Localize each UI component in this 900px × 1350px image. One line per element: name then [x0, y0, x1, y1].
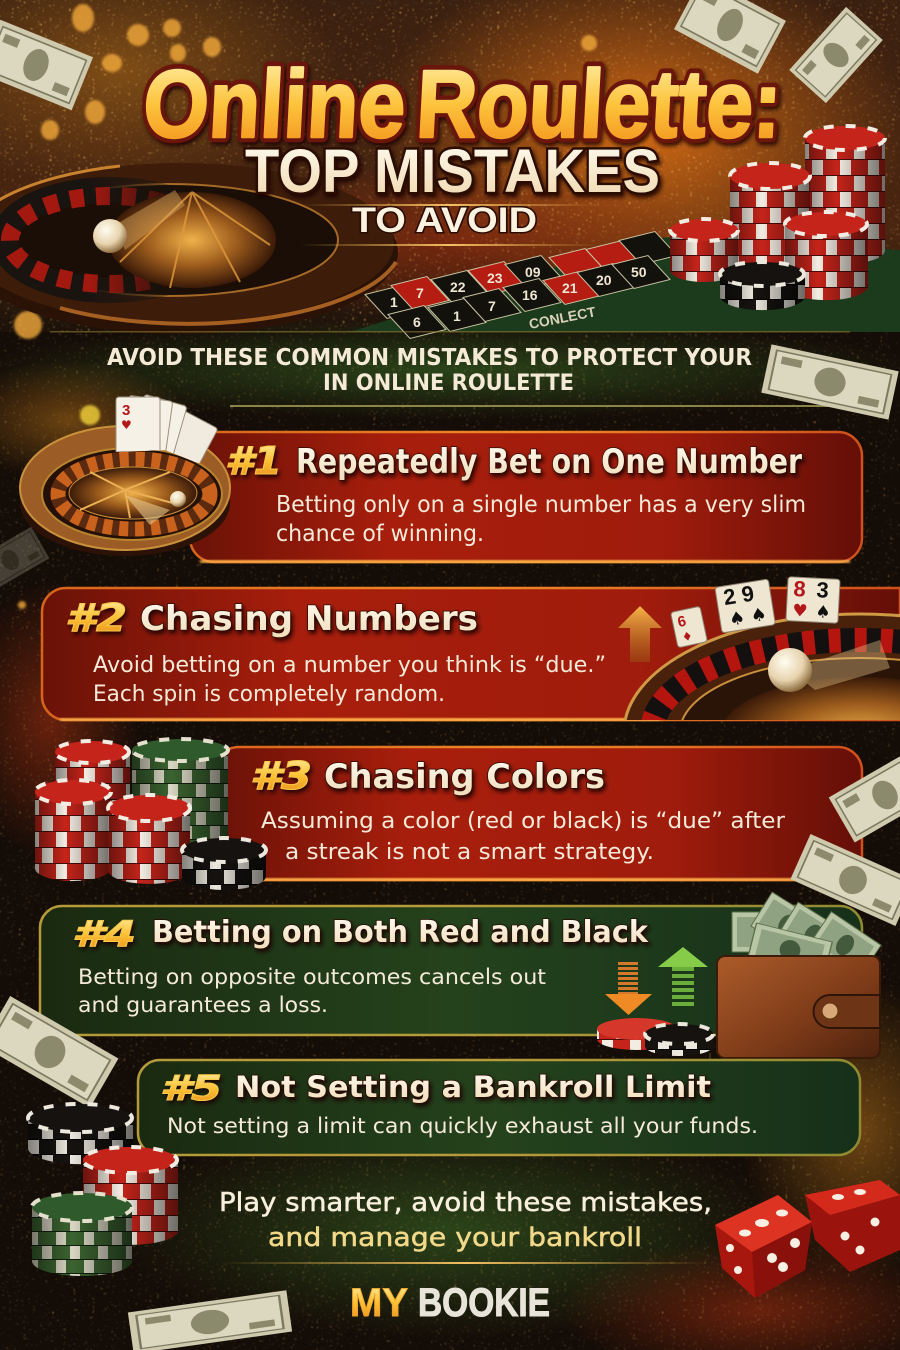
logo: [350, 1281, 550, 1325]
logo: MY: [350, 1281, 408, 1325]
icon: playing cards 1: 3: [164, 411, 179, 430]
closing message: Play smarter, avoid these mistakes,: [219, 1188, 712, 1218]
subtitle band: [50, 331, 870, 407]
title: [141, 51, 784, 246]
icon: up arrow green: [658, 947, 708, 1006]
betting table: 23: [487, 270, 503, 286]
heading 2: #2: [65, 596, 127, 640]
body text 3: a streak is not a smart strategy.: [285, 840, 654, 865]
icon: playing cards 1: 3: [122, 402, 130, 419]
body text 4: Betting on opposite outcomes cancels out: [78, 965, 546, 989]
betting table: 7: [416, 285, 424, 301]
betting table: 20: [596, 272, 612, 288]
body text 5: Not setting a limit can quickly exhaust all your funds.: [167, 1114, 758, 1138]
icon: down arrow orange: [605, 962, 652, 1015]
icon: playing cards 1: ♠: [129, 417, 142, 432]
body text 1: Betting only on a single number has a very slim: [276, 492, 806, 518]
betting table: 1: [390, 294, 398, 310]
icon: roulette wheel 1: [20, 426, 230, 556]
heading 5: Not Setting a Bankroll Limit: [235, 1070, 711, 1104]
betting table: 6: [413, 314, 421, 330]
betting table: 50: [631, 264, 647, 280]
logo: BOOKIE: [418, 1281, 550, 1325]
icon: playing cards 2: ♠ ♠: [728, 604, 768, 631]
heading 2: Chasing Numbers: [140, 599, 478, 639]
subtitle band: AVOID THESE COMMON MISTAKES TO PROTECT YOUR: [107, 345, 752, 371]
heading 3: Chasing Colors: [324, 757, 605, 797]
title: Online Roulette:: [141, 51, 784, 158]
heading 1: #1: [225, 439, 282, 483]
heading 4: #4: [72, 914, 136, 955]
body text 2: Avoid betting on a number you think is “due.”: [93, 653, 606, 678]
icon: playing cards 1: ♥: [157, 425, 173, 442]
money: left and bottom: [0, 527, 292, 1350]
icon: playing cards 2: ♦: [681, 629, 694, 645]
body text 4: [78, 965, 546, 1017]
betting table: 09: [525, 264, 541, 280]
icon: playing cards 1: [116, 394, 218, 464]
betting table: 7: [488, 298, 496, 314]
body text 1: chance of winning.: [276, 521, 484, 547]
icon: playing cards 1: ♥: [121, 418, 132, 432]
body text 3: Assuming a color (red or black) is “due” after: [261, 809, 786, 834]
body text 4: and guarantees a loss.: [78, 993, 328, 1017]
betting table: 22: [450, 279, 466, 295]
icon: playing cards 2: ♠: [815, 602, 831, 623]
money: subtitle right: [761, 344, 899, 420]
closing message: and manage your bankroll: [268, 1223, 642, 1253]
icon: playing cards 1: 3: [144, 401, 157, 419]
title: TO AVOID: [352, 201, 537, 240]
icon: chip stacks: [35, 739, 266, 890]
betting table: 21: [562, 280, 578, 296]
panel 3: [35, 739, 862, 890]
roulette wheel header: [0, 163, 398, 334]
panel 5: [138, 1060, 860, 1155]
body text 2: [93, 653, 606, 707]
closing message: [219, 1188, 712, 1264]
betting table: 16: [522, 287, 538, 303]
body text 3: [261, 809, 786, 865]
icon: wallet with cash: [717, 892, 881, 1058]
betting table: CONLECT: [528, 303, 597, 332]
panel 2: [40, 576, 900, 722]
panel 1: [20, 394, 862, 563]
icon: playing cards 2: 3: [816, 577, 829, 603]
heading 4: Betting on Both Red and Black: [152, 915, 649, 950]
panel 4: [40, 892, 881, 1058]
heading 1: Repeatedly Bet on One Number: [296, 442, 802, 482]
icon: up arrow orange: [618, 606, 662, 662]
title: Online Roulette:: [141, 51, 784, 158]
icon: small chips: [597, 1018, 713, 1056]
heading 5: #5: [160, 1069, 222, 1109]
money: top decorations: [0, 0, 883, 110]
body text 2: Each spin is completely random.: [93, 682, 445, 707]
betting table: [350, 232, 900, 338]
chip stacks top right: [670, 126, 885, 310]
icon: playing cards 1: 3: [132, 401, 143, 419]
subtitle band: IN ONLINE ROULETTE: [323, 371, 574, 396]
body text 1: [276, 492, 806, 547]
heading 3: #3: [250, 754, 312, 798]
heading 1: [225, 439, 802, 483]
icon: playing cards 2: ♥: [792, 601, 808, 622]
icon: playing cards 2: 2 9: [722, 581, 756, 610]
betting table: 1: [453, 308, 461, 324]
icon: roulette wheel 2: [624, 612, 900, 720]
icon: red dice: [715, 1180, 900, 1298]
icon: chip stacks bottom left: [28, 1104, 178, 1276]
money: right side: [790, 747, 900, 926]
title: TOP MISTAKES: [245, 137, 660, 205]
icon: playing cards 1: ♠: [140, 416, 154, 432]
icon: playing cards 2: [671, 576, 840, 648]
icon: playing cards 2: 8: [793, 576, 806, 602]
icon: playing cards 2: 6: [676, 613, 688, 631]
